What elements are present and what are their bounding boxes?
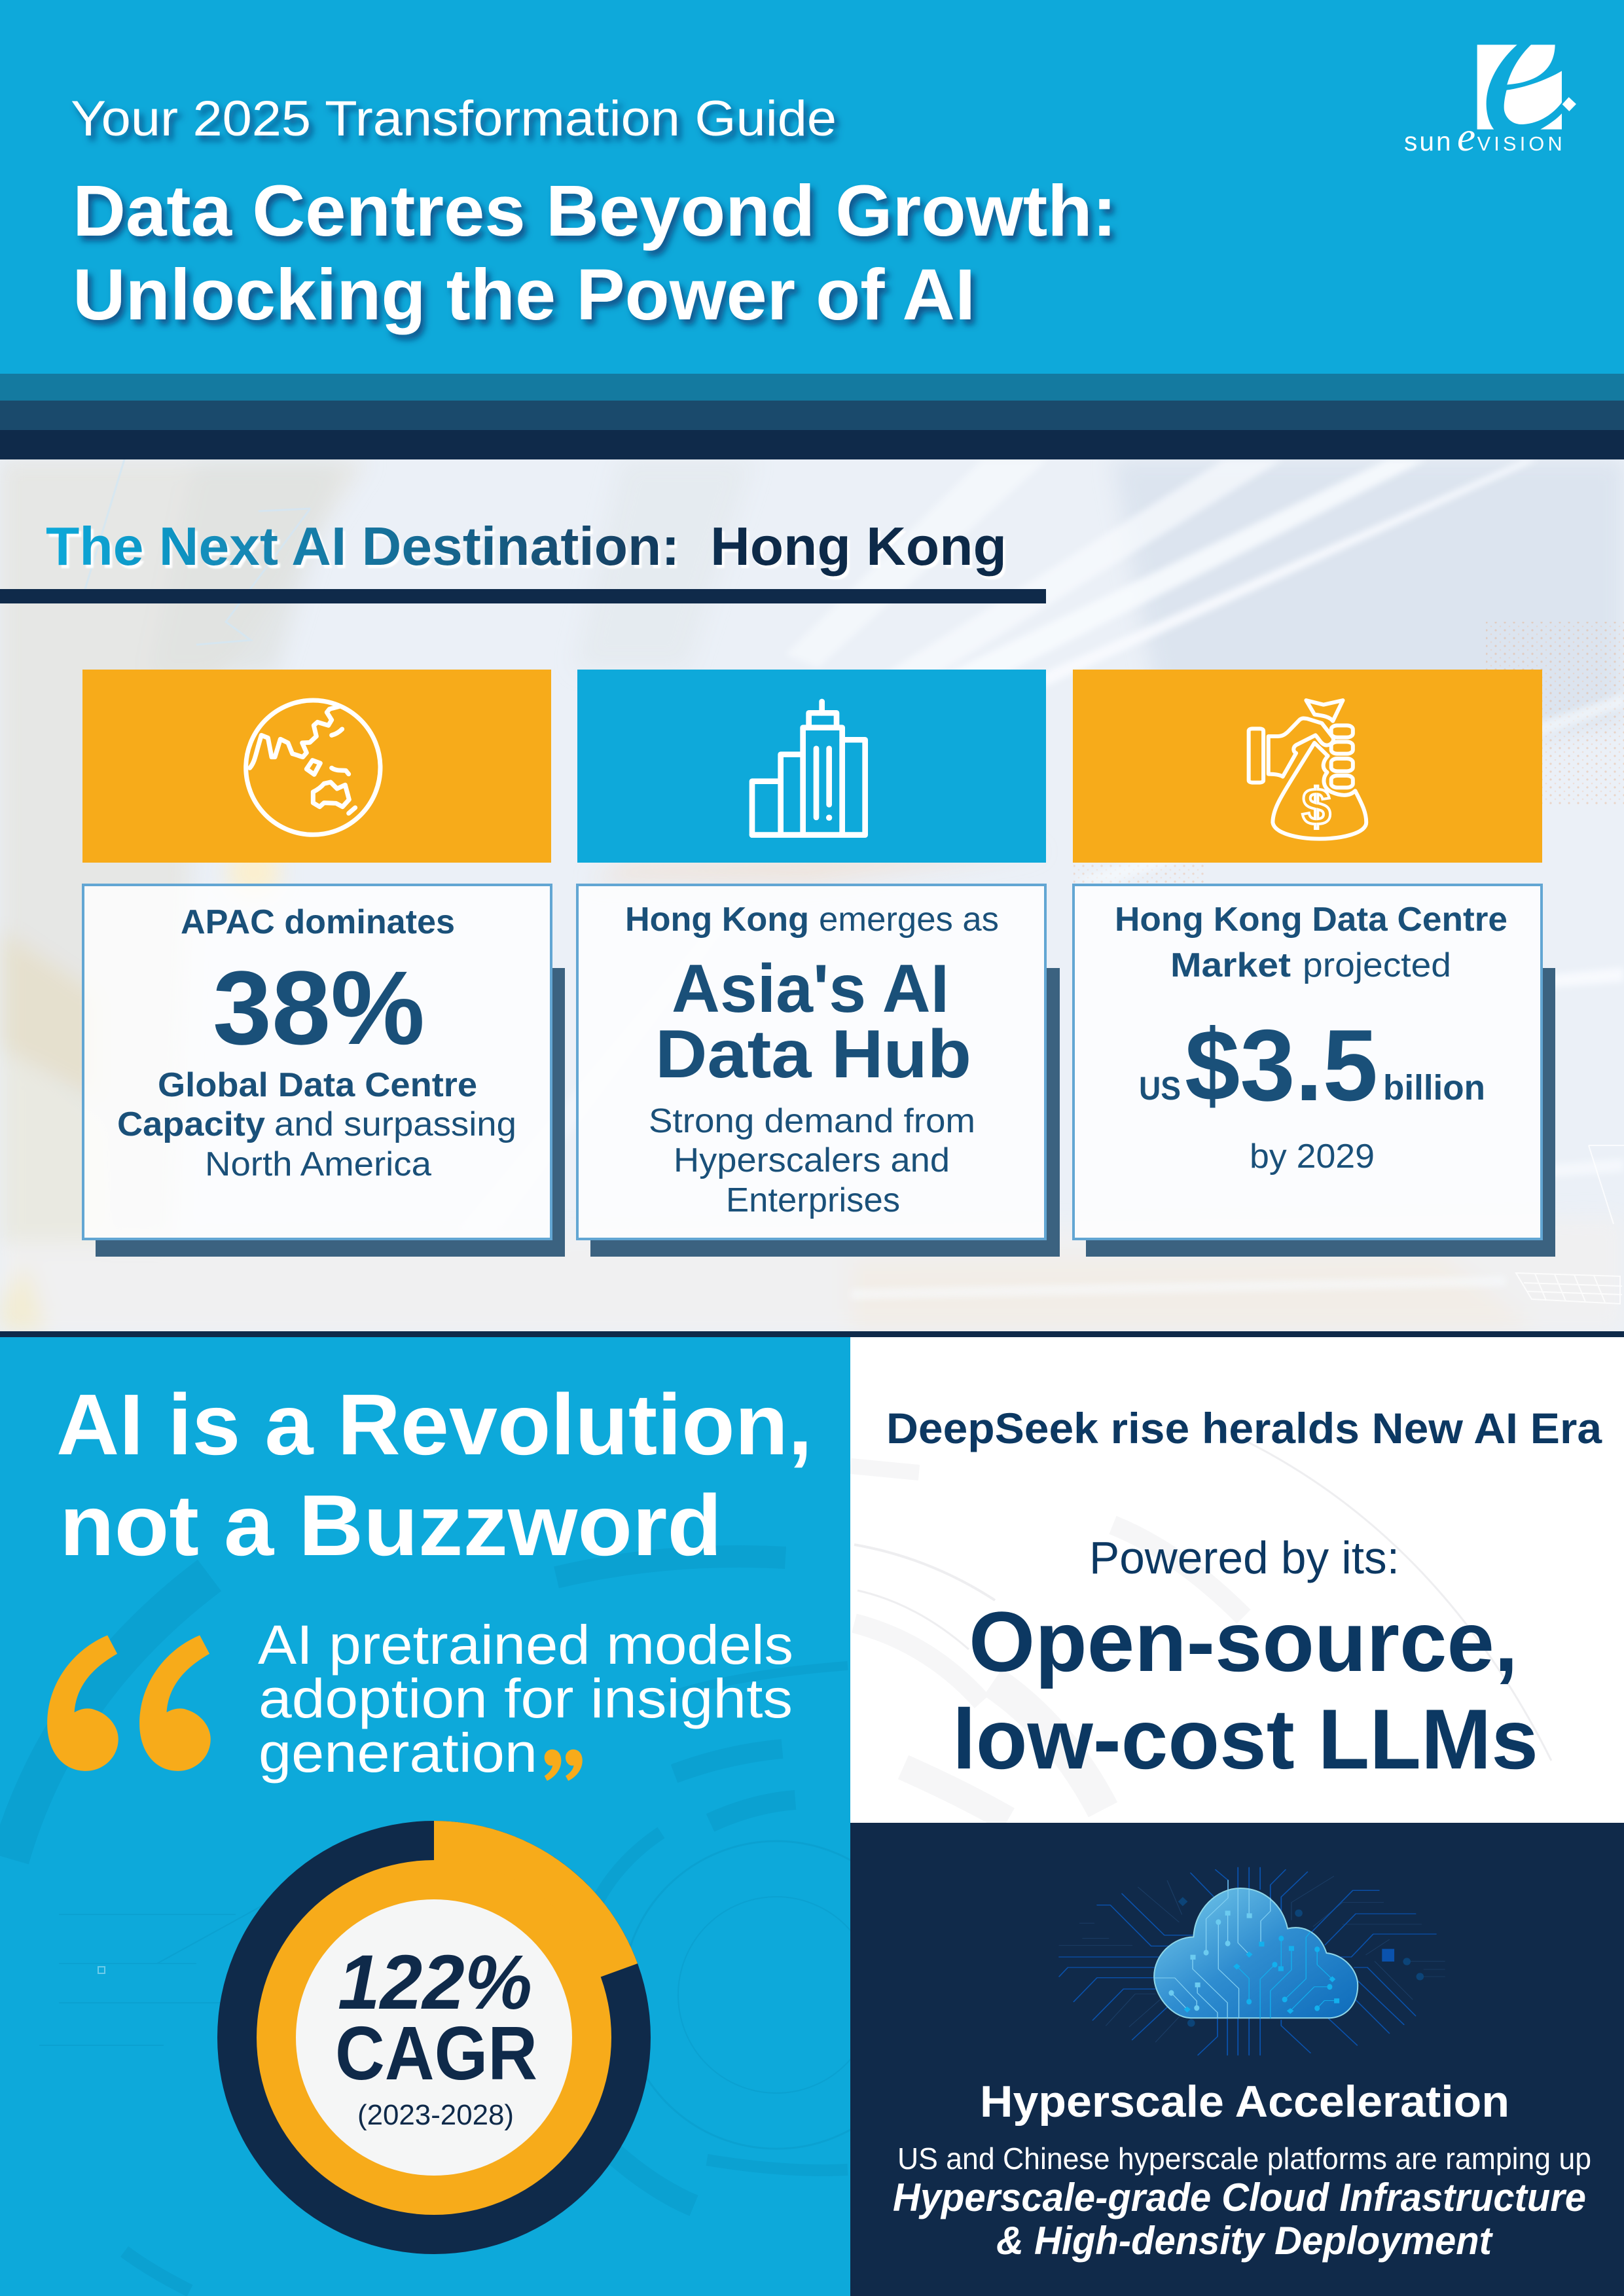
main title: Data Centres Beyond Growth: — [73, 171, 1117, 251]
panel: APAC card — [82, 670, 565, 1257]
card text: Enterprises — [726, 1181, 900, 1219]
donut chart: 122% CAGR: CAGR — [335, 2011, 537, 2096]
card text: Strong demand from — [649, 1102, 975, 1140]
card text — [625, 901, 999, 1219]
panel: hong kong section background — [0, 459, 1624, 1331]
donut chart: 122% CAGR — [217, 1821, 651, 2254]
donut chart: 122% CAGR: 122% — [338, 1939, 532, 2026]
card text: and surpassing — [274, 1105, 516, 1143]
card text: US — [1139, 1070, 1181, 1107]
card text — [117, 903, 516, 1183]
quote text — [258, 1614, 793, 1784]
card text: Data Hub — [655, 1016, 971, 1092]
card text: 38% — [213, 949, 425, 1066]
text: open-source LLMs: low-cost LLMs — [952, 1691, 1538, 1787]
card text: projected — [1303, 946, 1451, 984]
card text: emerges as — [819, 901, 999, 939]
text: hyperscale-grade infrastructure: Hyperscale-grade Cloud Infrastructure — [893, 2176, 1586, 2219]
icon: circuit cloud — [1059, 1867, 1445, 2055]
icon: sunevision logo: e — [1457, 114, 1475, 160]
panel: AI revolution — [0, 1337, 930, 2296]
icon: closing quote mark — [545, 1749, 583, 1781]
card text: Market — [1170, 946, 1291, 984]
heading: the next AI destination: The Next AI Destination: Hong Kong — [46, 516, 1007, 577]
card text: Capacity — [117, 1105, 265, 1143]
quote text: AI pretrained models — [258, 1614, 793, 1676]
card body — [83, 885, 551, 1239]
card text — [1115, 901, 1507, 1175]
header panel — [0, 0, 1624, 374]
card text: Hong Kong — [625, 901, 809, 939]
panel: DeepSeek — [850, 1412, 1602, 1823]
card shadow — [590, 968, 1060, 1257]
heading: DeepSeek: DeepSeek rise heralds New AI Era — [886, 1404, 1602, 1452]
heading: AI is a revolution: not a Buzzword — [60, 1477, 722, 1573]
quote text: generation — [259, 1722, 537, 1784]
panel: hyperscale acceleration — [850, 1823, 1624, 2296]
text: hyperscale-grade infrastructure — [893, 2176, 1586, 2263]
icon tile: money bag — [1073, 670, 1542, 863]
panel: market size card — [1073, 670, 1555, 1257]
card text: APAC dominates — [181, 903, 455, 941]
card text: Hyperscalers and — [674, 1141, 950, 1179]
text: hyperscale-grade infrastructure: & High-density Deployment — [996, 2219, 1494, 2263]
card shadow — [1086, 968, 1555, 1257]
card text: by 2029 — [1250, 1138, 1375, 1175]
quote text: adoption for insights — [259, 1668, 793, 1729]
card text: Global Data Centre — [158, 1066, 477, 1104]
heading underline — [0, 589, 1046, 603]
text: powered by: Powered by its: — [1089, 1532, 1399, 1583]
section divider — [0, 1331, 1624, 1337]
donut chart: 122% CAGR: (2023-2028) — [357, 2099, 514, 2131]
heading: the next AI destination — [0, 516, 1046, 603]
icon: sunevision logo — [1404, 45, 1576, 160]
card body — [577, 885, 1045, 1239]
background circuit pattern — [850, 1440, 1551, 1820]
panel: Hong Kong hub card — [577, 670, 1060, 1257]
main title: Unlocking the Power of AI — [73, 255, 975, 335]
icon: opening quote mark — [47, 1635, 211, 1771]
card text: Hong Kong Data Centre — [1115, 901, 1507, 939]
header stripes — [0, 374, 1624, 459]
icon tile: globe — [82, 670, 551, 863]
main title — [73, 171, 1117, 335]
background circuit pattern — [10, 1556, 930, 2291]
subtitle: Your 2025 Transformation Guide — [71, 91, 837, 147]
heading: AI is a revolution — [56, 1376, 812, 1573]
heading: hyperscale acceleration: Hyperscale Acceleration — [980, 2077, 1509, 2126]
icon: sunevision logo: VISION — [1477, 133, 1562, 155]
small square marker — [98, 1967, 105, 1973]
card text: $3.5 — [1185, 1009, 1378, 1122]
card text: North America — [205, 1145, 431, 1183]
heading: AI is a revolution: AI is a Revolution, — [56, 1376, 812, 1473]
icon: sunevision logo: sun — [1404, 126, 1451, 156]
text: platforms ramping up: US and Chinese hyperscale platforms are ramping up — [897, 2142, 1591, 2176]
text: open-source LLMs — [952, 1594, 1538, 1787]
card text: billion — [1383, 1068, 1485, 1107]
card body — [1074, 885, 1542, 1239]
card text: Asia's AI — [672, 951, 949, 1027]
icon tile: skyscraper — [577, 670, 1046, 863]
icon tile: money bag: $ — [1302, 778, 1331, 836]
text: open-source LLMs: Open-source, — [969, 1594, 1518, 1689]
card shadow — [96, 968, 565, 1257]
